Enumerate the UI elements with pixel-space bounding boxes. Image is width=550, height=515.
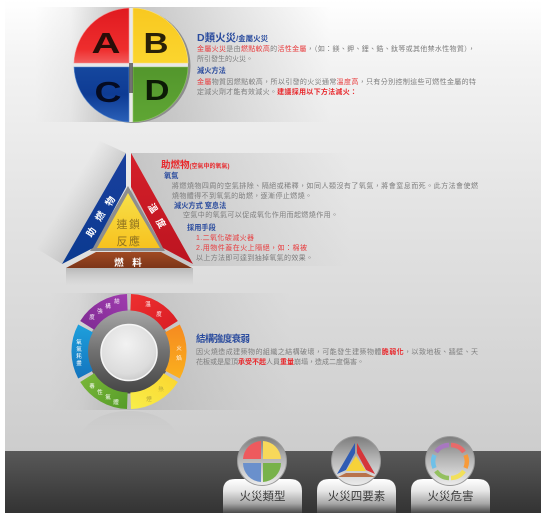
button base bbox=[411, 479, 490, 513]
inner channel bbox=[90, 186, 165, 251]
text: means summary: 以上方法即可達到抽掉氧氣的效果。 bbox=[196, 253, 313, 262]
yellow center: chain reaction bbox=[97, 193, 160, 248]
red side: temperature: 度 bbox=[153, 216, 168, 231]
text: structure line 2: 花板或是屋頂承受不起人員重量崩塌，造成二度傷害。 bbox=[196, 357, 364, 366]
button base bbox=[317, 479, 396, 513]
text: means 1: 1.二氧化碳滅火器 bbox=[196, 233, 254, 242]
segment: toxic gas bbox=[80, 373, 128, 409]
segment: heat smoke bbox=[130, 373, 178, 409]
segment: toxic gas: 性 bbox=[97, 388, 103, 396]
segment: heat smoke: 熱 bbox=[158, 385, 164, 393]
segment: oxygen depletion: 耗 bbox=[76, 352, 82, 360]
blue side: oxidizer bbox=[62, 153, 126, 264]
heading: smothering: 減火方式 窒息法 bbox=[174, 201, 226, 210]
button label: 火災危害 bbox=[428, 489, 474, 503]
ABCD pie chart: D bbox=[144, 75, 170, 107]
blue side: oxidizer: 助 bbox=[84, 225, 99, 240]
panel shadow bbox=[131, 153, 351, 266]
segment: temperature: 度 bbox=[156, 310, 162, 318]
segment: toxic gas: 氣 bbox=[105, 393, 111, 401]
segment: oxygen depletion bbox=[71, 324, 93, 378]
brown side: fuel: 料 bbox=[132, 257, 142, 269]
text: smothering: 空氣中的氧氣可以促成氧化作用而起燃燒作用。 bbox=[183, 210, 338, 219]
triangle reflection bbox=[66, 268, 193, 286]
heading: means: 採用手段 bbox=[187, 223, 216, 232]
text: means 2: 2.用物件蓋在火上隔絕，如：棉被 bbox=[196, 243, 307, 252]
segment: flame: 火 bbox=[176, 346, 182, 352]
ABCD pie chart: C bbox=[94, 77, 122, 109]
button base bbox=[223, 479, 302, 513]
text: definition: 金屬火災是由燃點較高的活性金屬，（如：鎂、鉀、鋰、鋯、鈦等或其他禁水性物質）， bbox=[197, 44, 475, 53]
ABCD pie chart bbox=[74, 8, 190, 123]
fire triangle bbox=[62, 153, 193, 286]
segment: structural strength: 度 bbox=[89, 313, 95, 321]
segment: flame: 焰 bbox=[176, 354, 182, 362]
segment: structural strength bbox=[80, 294, 128, 330]
segment: heat smoke: 煙 bbox=[146, 395, 152, 403]
heading: class D: D類火災/金屬火災 bbox=[197, 31, 269, 44]
red side: temperature: 溫 bbox=[145, 201, 160, 216]
panel shadow bbox=[50, 293, 290, 410]
segment: structural strength: 結 bbox=[114, 297, 120, 305]
hazard ring bbox=[71, 294, 187, 409]
button label: 火災四要素 bbox=[328, 490, 385, 503]
left wedge shadow bbox=[34, 141, 126, 264]
segment: toxic gas: 體 bbox=[113, 398, 119, 406]
segment: structural strength: 構 bbox=[105, 302, 111, 310]
blue side: oxidizer: 燃 bbox=[93, 209, 108, 224]
segment: flame bbox=[165, 324, 187, 378]
ABCD pie chart: B bbox=[144, 28, 168, 60]
icon: ring ball bbox=[426, 436, 474, 486]
blue side: oxidizer: 物 bbox=[103, 194, 118, 209]
text: oxygen line 2: 燒物體得不到氧氣的助燃，逐漸停止燃燒。 bbox=[172, 191, 312, 200]
button: four elements bbox=[317, 436, 396, 513]
segment: oxygen depletion: 氧 bbox=[76, 338, 82, 346]
yellow center: chain reaction: 連鎖 bbox=[116, 217, 142, 231]
heading: oxidizer: 助燃物(空氣中的氧氣) bbox=[161, 159, 230, 171]
brown side: fuel: 燃 bbox=[114, 257, 124, 269]
ring reflection bbox=[78, 411, 180, 440]
button: fire hazards bbox=[411, 436, 490, 513]
icon: triangle ball bbox=[332, 436, 380, 486]
text: oxygen line 1: 將燃燒物四周的空氣排除、隔絕或稀釋，如同人類沒有了氧氣，將會窒息而死。此方法會使燃 bbox=[172, 181, 478, 190]
segment: temperature: 溫 bbox=[145, 300, 151, 308]
panel shadow bbox=[35, 7, 330, 122]
heading: method: 減火方法 bbox=[197, 66, 226, 75]
ABCD pie chart: A bbox=[92, 28, 121, 60]
segment: temperature bbox=[130, 294, 178, 330]
red side: temperature bbox=[131, 153, 193, 264]
icon: pie ball bbox=[238, 436, 286, 486]
panel: oxidizer bbox=[34, 141, 478, 286]
panel: structure weakening bbox=[50, 293, 478, 440]
segment: toxic gas: 毒 bbox=[89, 382, 95, 390]
text: definition line 2: 所引發生的火災。 bbox=[197, 54, 253, 63]
brown side: fuel bbox=[66, 252, 192, 269]
panel: class D fire bbox=[35, 7, 476, 123]
button label: 火災類型 bbox=[240, 489, 286, 503]
footer band bbox=[5, 451, 541, 513]
text: method line 1: 金屬物質因燃點較高，所以引發的火災通常溫度高，只有分別控制這些可燃性金屬的特 bbox=[197, 77, 476, 86]
button: fire types bbox=[223, 436, 302, 513]
text: method line 2: 定減火劑才能有效減火。建議採用以下方法滅火： bbox=[197, 87, 357, 96]
heading: oxygen: 氧氣 bbox=[164, 171, 178, 180]
segment: structural strength: 強 bbox=[97, 307, 103, 315]
segment: oxygen depletion: 盡 bbox=[76, 359, 82, 367]
text: structure line 1: 因火燒造成建築物的組織之結構破壞，可能發生建築物體脆弱化，以致地板、牆壁、天 bbox=[196, 347, 478, 356]
center disk bbox=[101, 324, 157, 380]
heading: structure: 結構強度衰弱 bbox=[196, 333, 250, 345]
yellow center: chain reaction: 反應 bbox=[116, 234, 142, 248]
segment: oxygen depletion: 氣 bbox=[76, 345, 82, 353]
